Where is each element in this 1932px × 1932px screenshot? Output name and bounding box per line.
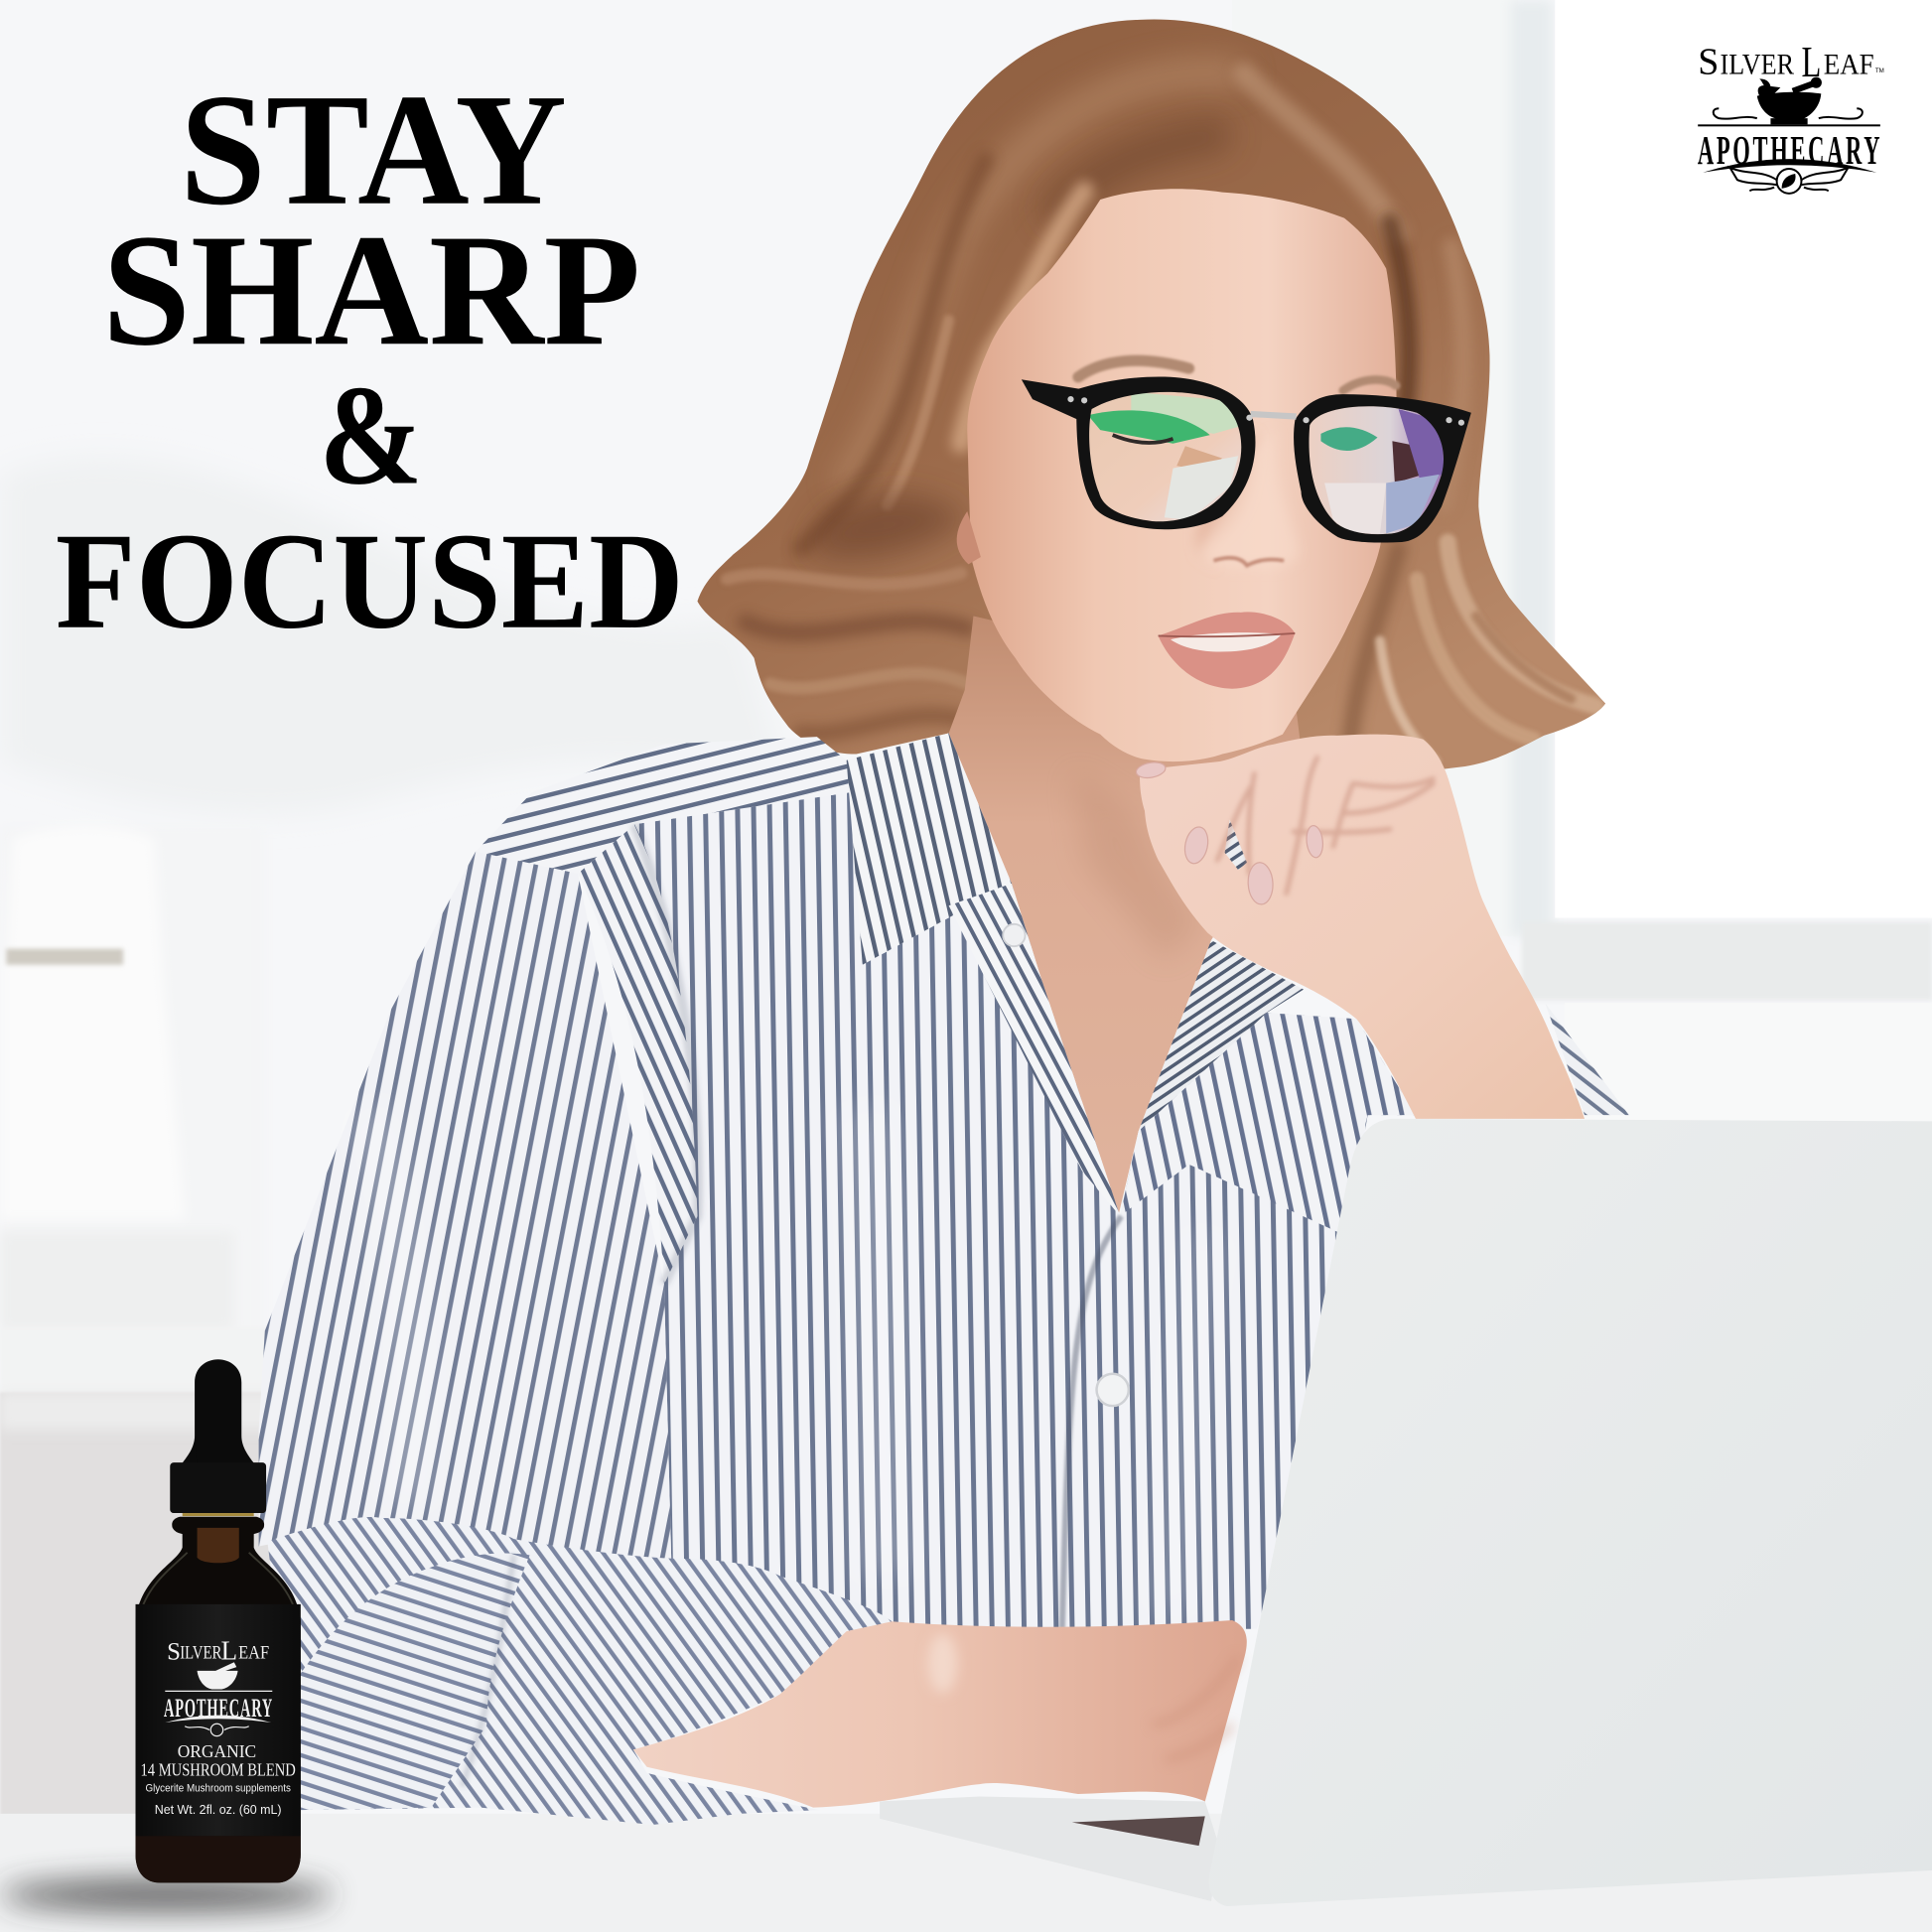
title: stay sharp and focused: & [319,357,423,515]
left frame [1076,377,1255,529]
label: L [220,1636,237,1666]
eyebrows [1078,360,1396,390]
laptop base [880,1796,1220,1901]
amber neck glow [198,1528,239,1563]
neck and chest [949,617,1307,1213]
label: S [167,1639,181,1666]
logo: silver leaf apothecary: TM [1875,68,1884,74]
hair [697,19,1605,788]
shirt collar left [847,733,1012,965]
label mortar icon [198,1662,238,1690]
title: stay sharp and focused [56,61,684,658]
rolled sleeve cuff [267,1517,893,1825]
ear and cheek shadow [957,511,981,564]
right lens [1309,406,1445,534]
label: EAF [238,1642,269,1663]
shirt yoke [476,737,852,874]
logo: silver leaf apothecary: APOTHECARY [1698,129,1880,174]
label: ORGANIC [178,1741,256,1761]
label: ILVER [180,1642,222,1663]
shirt right front [1120,1013,1416,1232]
shirt collar right [1139,940,1304,1131]
laptop lid [1209,1119,1932,1906]
glasses [1022,377,1471,543]
bottle glass [136,1517,301,1882]
bottle shadow [0,1877,333,1912]
label: Glycerite Mushroom supplements [145,1783,291,1795]
shirt far shoulder [1545,1003,1629,1115]
logo ornament [1729,168,1849,194]
woman [259,19,1629,1825]
label: 14 MUSHROOM BLEND [140,1759,296,1779]
shirt body [634,792,1416,1629]
logo: silver leaf apothecary: L [1801,37,1821,86]
gold ring [183,1513,254,1516]
bottle base amber tint [136,1836,301,1882]
left temple [1022,379,1082,421]
logo: silver leaf apothecary [1698,37,1884,194]
title: stay sharp and focused: SHARP [102,201,640,378]
dropper bulb [195,1359,256,1466]
shirt placket [949,884,1120,1216]
face [967,189,1397,761]
product bottle [0,1359,333,1912]
logo: silver leaf apothecary: EAF [1824,48,1874,80]
left lens [1088,392,1244,521]
chin shadow [1072,770,1201,961]
logo: silver leaf apothecary: ILVER [1721,48,1794,80]
lower arm and typing hand [633,1620,1247,1808]
logo: silver leaf apothecary: S [1698,41,1719,82]
right frame [1294,394,1471,543]
title: stay sharp and focused: STAY [180,61,567,238]
lips [1159,612,1295,689]
shirt buttons [1003,924,1129,1406]
dropper cap [170,1462,266,1513]
label: APOTHECARY [164,1693,272,1723]
label [136,1604,301,1836]
shirt folds and shading [369,824,1207,1629]
raised hand [1135,735,1585,1119]
logo mortar icon [1714,77,1863,124]
bridge [1251,414,1297,416]
sleeve armhole [578,824,697,1284]
label: Net Wt. 2fl. oz. (60 mL) [155,1802,282,1817]
laptop [880,1119,1932,1906]
nose [1196,431,1299,569]
laptop keyboard [1072,1816,1205,1846]
shirt sleeve [259,852,671,1568]
title: stay sharp and focused: FOCUSED [56,505,684,658]
table top [0,1814,1932,1932]
